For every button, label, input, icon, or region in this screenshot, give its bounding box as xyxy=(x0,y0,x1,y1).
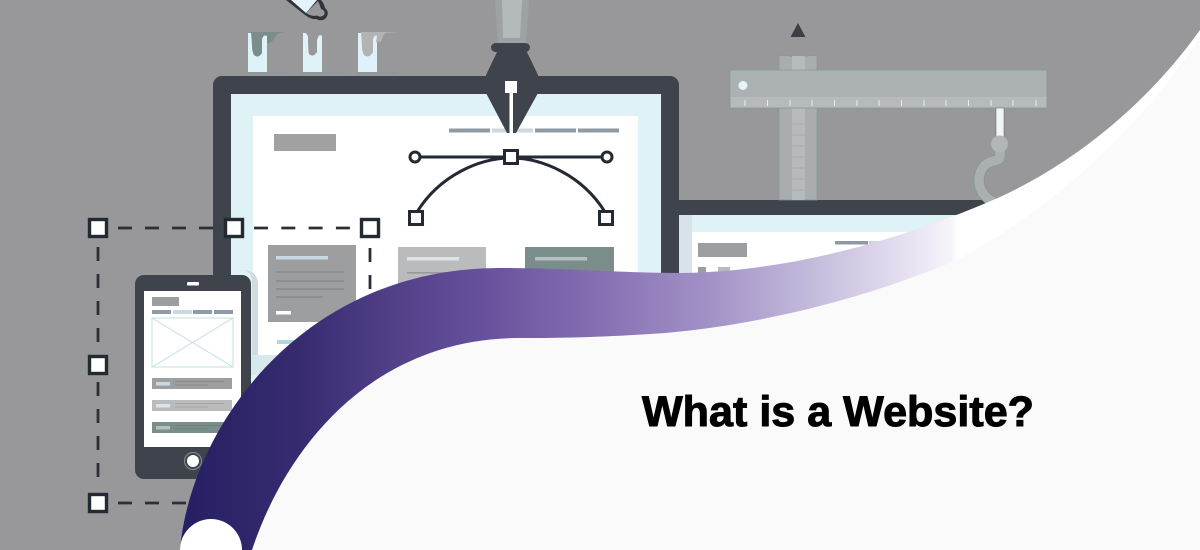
phone xyxy=(135,275,251,479)
white circle xyxy=(180,519,242,550)
nav bars xyxy=(449,128,619,132)
second monitor xyxy=(670,200,1079,360)
icon: pen nib xyxy=(486,0,538,137)
title: What is a Website? xyxy=(642,388,1034,436)
icon: paint cups xyxy=(247,32,398,73)
light content panel xyxy=(252,37,1200,550)
bezier curve tool xyxy=(410,150,612,224)
icon: T-square ruler xyxy=(730,55,1047,200)
icon: paint tube xyxy=(286,0,328,20)
card three xyxy=(525,247,614,317)
logo block xyxy=(274,134,336,151)
main monitor xyxy=(213,76,679,396)
icon: pencil tip triangle xyxy=(790,23,806,37)
home button xyxy=(184,452,202,470)
card two xyxy=(398,247,486,317)
dashed selection box xyxy=(90,220,378,512)
card one xyxy=(268,245,356,322)
icon: hook xyxy=(979,108,1008,203)
list rows xyxy=(152,378,232,433)
image placeholder xyxy=(152,318,233,367)
